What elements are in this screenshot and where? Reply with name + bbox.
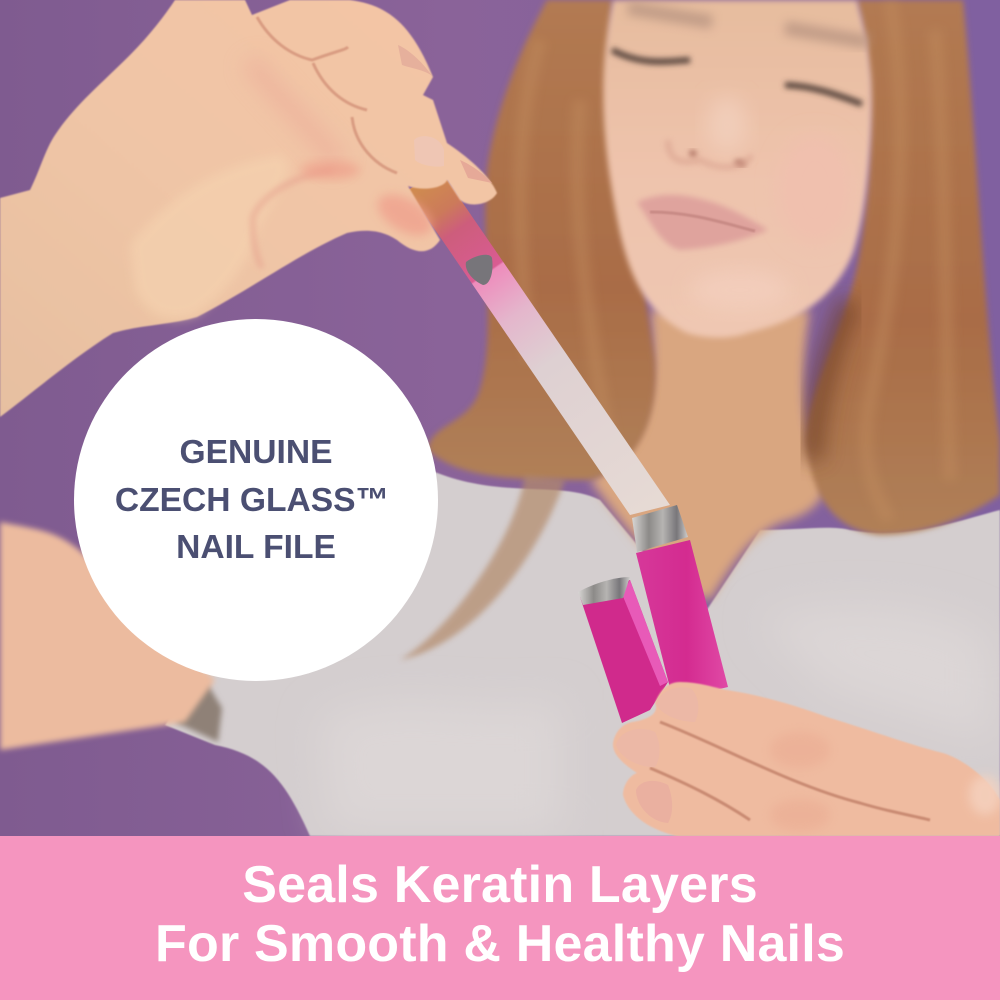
metal collar [632,505,688,552]
file emblem [466,255,493,285]
lower hand [613,682,1000,836]
cheek blush [777,135,853,245]
finger separations [257,17,397,173]
cap top metal [578,577,630,605]
raised hand and wrist [0,0,497,417]
banner headline: Seals Keratin Layers [242,856,758,914]
callout text: GENUINE [180,434,332,471]
sleeve shadow [175,680,222,742]
eyes [612,50,862,104]
fingernails [398,45,432,76]
lips [637,195,768,250]
callout text: CZECH GLASS™ [115,482,389,518]
callout text: NAIL FILE [176,529,336,566]
thumb tip redness [371,186,439,244]
finger shading [650,722,930,820]
lower arm [0,522,215,750]
case cap [578,577,668,723]
hair [400,0,1000,660]
callout circle [74,319,438,681]
nail file [408,179,670,515]
eyebrows [628,8,868,42]
shirt [165,470,1000,836]
callout text [115,434,389,566]
open case body [632,505,728,700]
thumb pad highlight [130,155,288,318]
fingernails [656,687,698,722]
shirt texture shade [320,607,990,830]
banner headline: For Smooth & Healthy Nails [155,915,845,973]
palm shading [250,60,340,165]
banner headline [155,856,845,973]
bottom banner [0,836,1000,1000]
hair strand over shirt [400,475,565,660]
nose [690,152,745,164]
face [603,0,872,338]
hair streaks [520,0,950,520]
neck [590,310,826,600]
